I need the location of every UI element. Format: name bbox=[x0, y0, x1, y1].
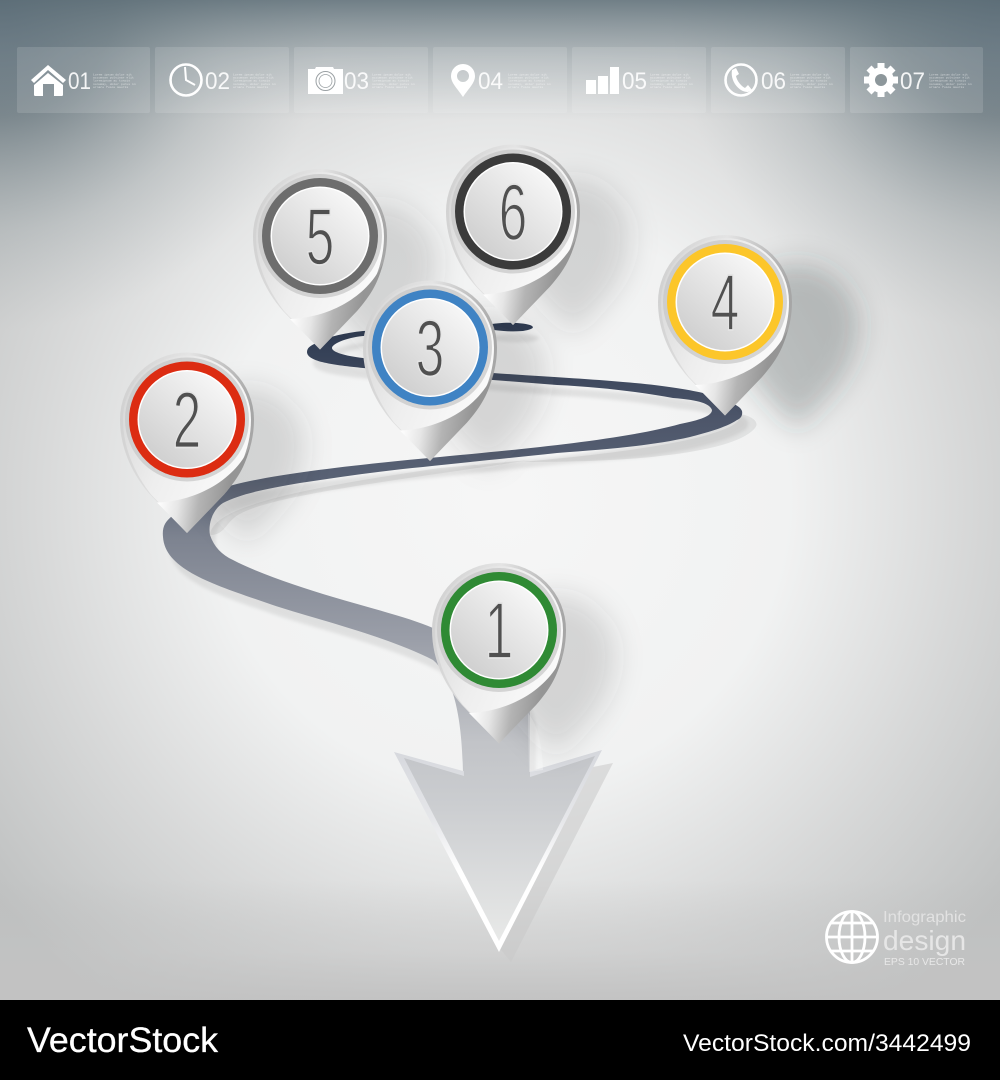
tile 07: Lorem ipsum dolor sit bbox=[929, 72, 968, 76]
footer bar: VectorStock bbox=[27, 1021, 219, 1060]
icon: camera bbox=[308, 67, 343, 94]
tile 03: accumsan pulvinar elit bbox=[372, 76, 413, 80]
tile 04: loremipsum ac turpis bbox=[508, 79, 545, 83]
tile 06: 06 bbox=[761, 68, 786, 95]
arrow head shadow bbox=[497, 763, 613, 962]
tile 07: 07 bbox=[900, 68, 925, 95]
ribbon shadow bbox=[169, 334, 757, 786]
tile 01: 01 bbox=[68, 68, 91, 95]
tile 04: ornare fusce mauris bbox=[508, 85, 543, 89]
tile 05: 05 bbox=[622, 68, 647, 95]
winding ribbon path bbox=[163, 323, 742, 775]
tile 01: loremipsum ac turpis bbox=[93, 79, 130, 83]
icon: home bbox=[31, 65, 66, 96]
tile 03: Lorem ipsum dolor sit bbox=[372, 72, 411, 76]
pin 2: 2 bbox=[173, 376, 201, 465]
logo: infographic design bbox=[826, 909, 966, 968]
tile 02: Lorem ipsum dolor sit bbox=[233, 72, 272, 76]
icon: globe bbox=[826, 911, 878, 963]
pin 3: 3 bbox=[416, 304, 444, 393]
tile 01: accumsan pulvinar elit bbox=[93, 76, 134, 80]
tile 05: nonummy, dolor purus in bbox=[650, 82, 693, 86]
tile 06: accumsan pulvinar elit bbox=[790, 76, 831, 80]
tile 02: nonummy, dolor purus in bbox=[233, 82, 276, 86]
tile 06: ornare fusce mauris bbox=[790, 85, 825, 89]
tile 02: accumsan pulvinar elit bbox=[233, 76, 274, 80]
tile 03: 03 bbox=[344, 68, 369, 95]
pin 1 bbox=[432, 563, 566, 744]
tile 06 bbox=[711, 47, 845, 113]
footer bar: VectorStock.com/3442499 bbox=[683, 1030, 971, 1057]
tile 05: accumsan pulvinar elit bbox=[650, 76, 691, 80]
tile 07: accumsan pulvinar elit bbox=[929, 76, 970, 80]
icon: phone bbox=[726, 64, 756, 96]
pin 6: 6 bbox=[499, 168, 527, 257]
footer bar bbox=[0, 1000, 1000, 1080]
large arrow head bbox=[394, 713, 602, 952]
logo: infographic design: EPS 10 VECTOR bbox=[884, 957, 965, 968]
pin 4 bbox=[658, 235, 792, 416]
logo: infographic design: Infographic bbox=[883, 909, 966, 926]
tile 04: 04 bbox=[478, 68, 503, 95]
tile 03 bbox=[294, 47, 428, 113]
tile 01: Lorem ipsum dolor sit bbox=[93, 72, 132, 76]
pin 2 bbox=[120, 352, 254, 533]
tile 05: loremipsum ac turpis bbox=[650, 79, 687, 83]
tile 06: loremipsum ac turpis bbox=[790, 79, 827, 83]
tile 01: ornare fusce mauris bbox=[93, 85, 128, 89]
tile 06: nonummy, dolor purus in bbox=[790, 82, 833, 86]
pin 1: 1 bbox=[485, 587, 513, 676]
icon: gear bbox=[864, 63, 898, 97]
tile 02: 02 bbox=[205, 68, 230, 95]
pin 3 bbox=[363, 280, 497, 461]
tile 02: ornare fusce mauris bbox=[233, 85, 268, 89]
tile 02: loremipsum ac turpis bbox=[233, 79, 270, 83]
tile 04 bbox=[433, 47, 567, 113]
tile 06: Lorem ipsum dolor sit bbox=[790, 72, 829, 76]
pin 6 bbox=[446, 144, 580, 325]
tile 03: nonummy, dolor purus in bbox=[372, 82, 415, 86]
tile 05: Lorem ipsum dolor sit bbox=[650, 72, 689, 76]
pin 4: 4 bbox=[711, 259, 739, 348]
tile 01: nonummy, dolor purus in bbox=[93, 82, 136, 86]
pin 5 bbox=[253, 169, 387, 350]
tile 01 bbox=[17, 47, 150, 113]
tile 05 bbox=[572, 47, 706, 113]
pin 5: 5 bbox=[306, 193, 334, 282]
tile 07: ornare fusce mauris bbox=[929, 85, 964, 89]
tile 03: ornare fusce mauris bbox=[372, 85, 407, 89]
tile 05: ornare fusce mauris bbox=[650, 85, 685, 89]
tile 04: nonummy, dolor purus in bbox=[508, 82, 551, 86]
pin shadows bbox=[190, 180, 859, 755]
tile 07: nonummy, dolor purus in bbox=[929, 82, 972, 86]
logo: infographic design: design bbox=[883, 925, 966, 956]
top icon bar bbox=[17, 47, 983, 113]
tile 03: loremipsum ac turpis bbox=[372, 79, 409, 83]
tile 07 bbox=[850, 47, 983, 113]
tile 04: accumsan pulvinar elit bbox=[508, 76, 549, 80]
tile 07: loremipsum ac turpis bbox=[929, 79, 966, 83]
icon: bar chart bbox=[586, 67, 619, 94]
icon: map pin bbox=[451, 64, 475, 97]
icon: clock bbox=[170, 64, 202, 96]
tile 04: Lorem ipsum dolor sit bbox=[508, 72, 547, 76]
tile 02 bbox=[155, 47, 289, 113]
